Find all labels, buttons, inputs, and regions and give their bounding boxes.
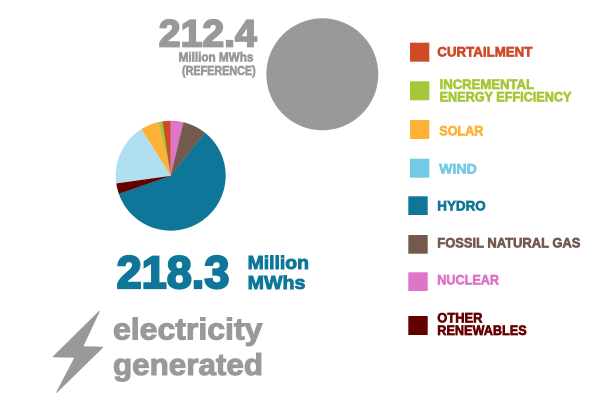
legend: nuclear: NUCLEAR — [437, 271, 499, 287]
generated total — [117, 247, 309, 298]
legend: curtailment — [410, 43, 533, 62]
legend: fossil natural gas: FOSSIL NATURAL GAS — [437, 234, 580, 250]
reference total: (REFERENCE) — [182, 64, 256, 78]
legend — [408, 43, 580, 338]
legend: solar — [410, 120, 483, 139]
legend: hydro — [408, 196, 486, 215]
legend: fossil natural gas — [408, 234, 580, 254]
legend: curtailment: CURTAILMENT — [437, 44, 533, 60]
legend: nuclear — [408, 271, 499, 291]
legend: hydro: HYDRO — [437, 198, 486, 214]
heading: electricity generated: generated — [113, 347, 263, 382]
pie chart: electricity generated mix — [116, 121, 226, 231]
icon: lightning bolt — [53, 311, 103, 392]
legend: other renewables — [408, 311, 527, 338]
generated total: MWhs — [248, 272, 305, 293]
legend: wind — [410, 159, 477, 178]
legend: solar: SOLAR — [439, 122, 483, 138]
legend: incremental energy efficiency — [410, 77, 571, 104]
legend: incremental energy efficiency: INCREMENTAL — [440, 77, 534, 92]
legend: wind: WIND — [439, 161, 477, 177]
reference total — [159, 13, 257, 78]
legend: incremental energy efficiency: ENERGY EFFICIENCY — [440, 90, 571, 104]
legend: other renewables: RENEWABLES — [437, 323, 527, 338]
legend: other renewables: OTHER — [437, 311, 483, 326]
heading: electricity generated — [113, 311, 263, 382]
generated total: Million — [248, 252, 309, 273]
reference total: Million MWhs — [179, 51, 253, 65]
reference circle — [266, 18, 378, 130]
reference total: 212.4 — [159, 13, 257, 55]
generated total: 218.3 — [117, 247, 229, 298]
heading: electricity generated: electricity — [113, 311, 263, 346]
